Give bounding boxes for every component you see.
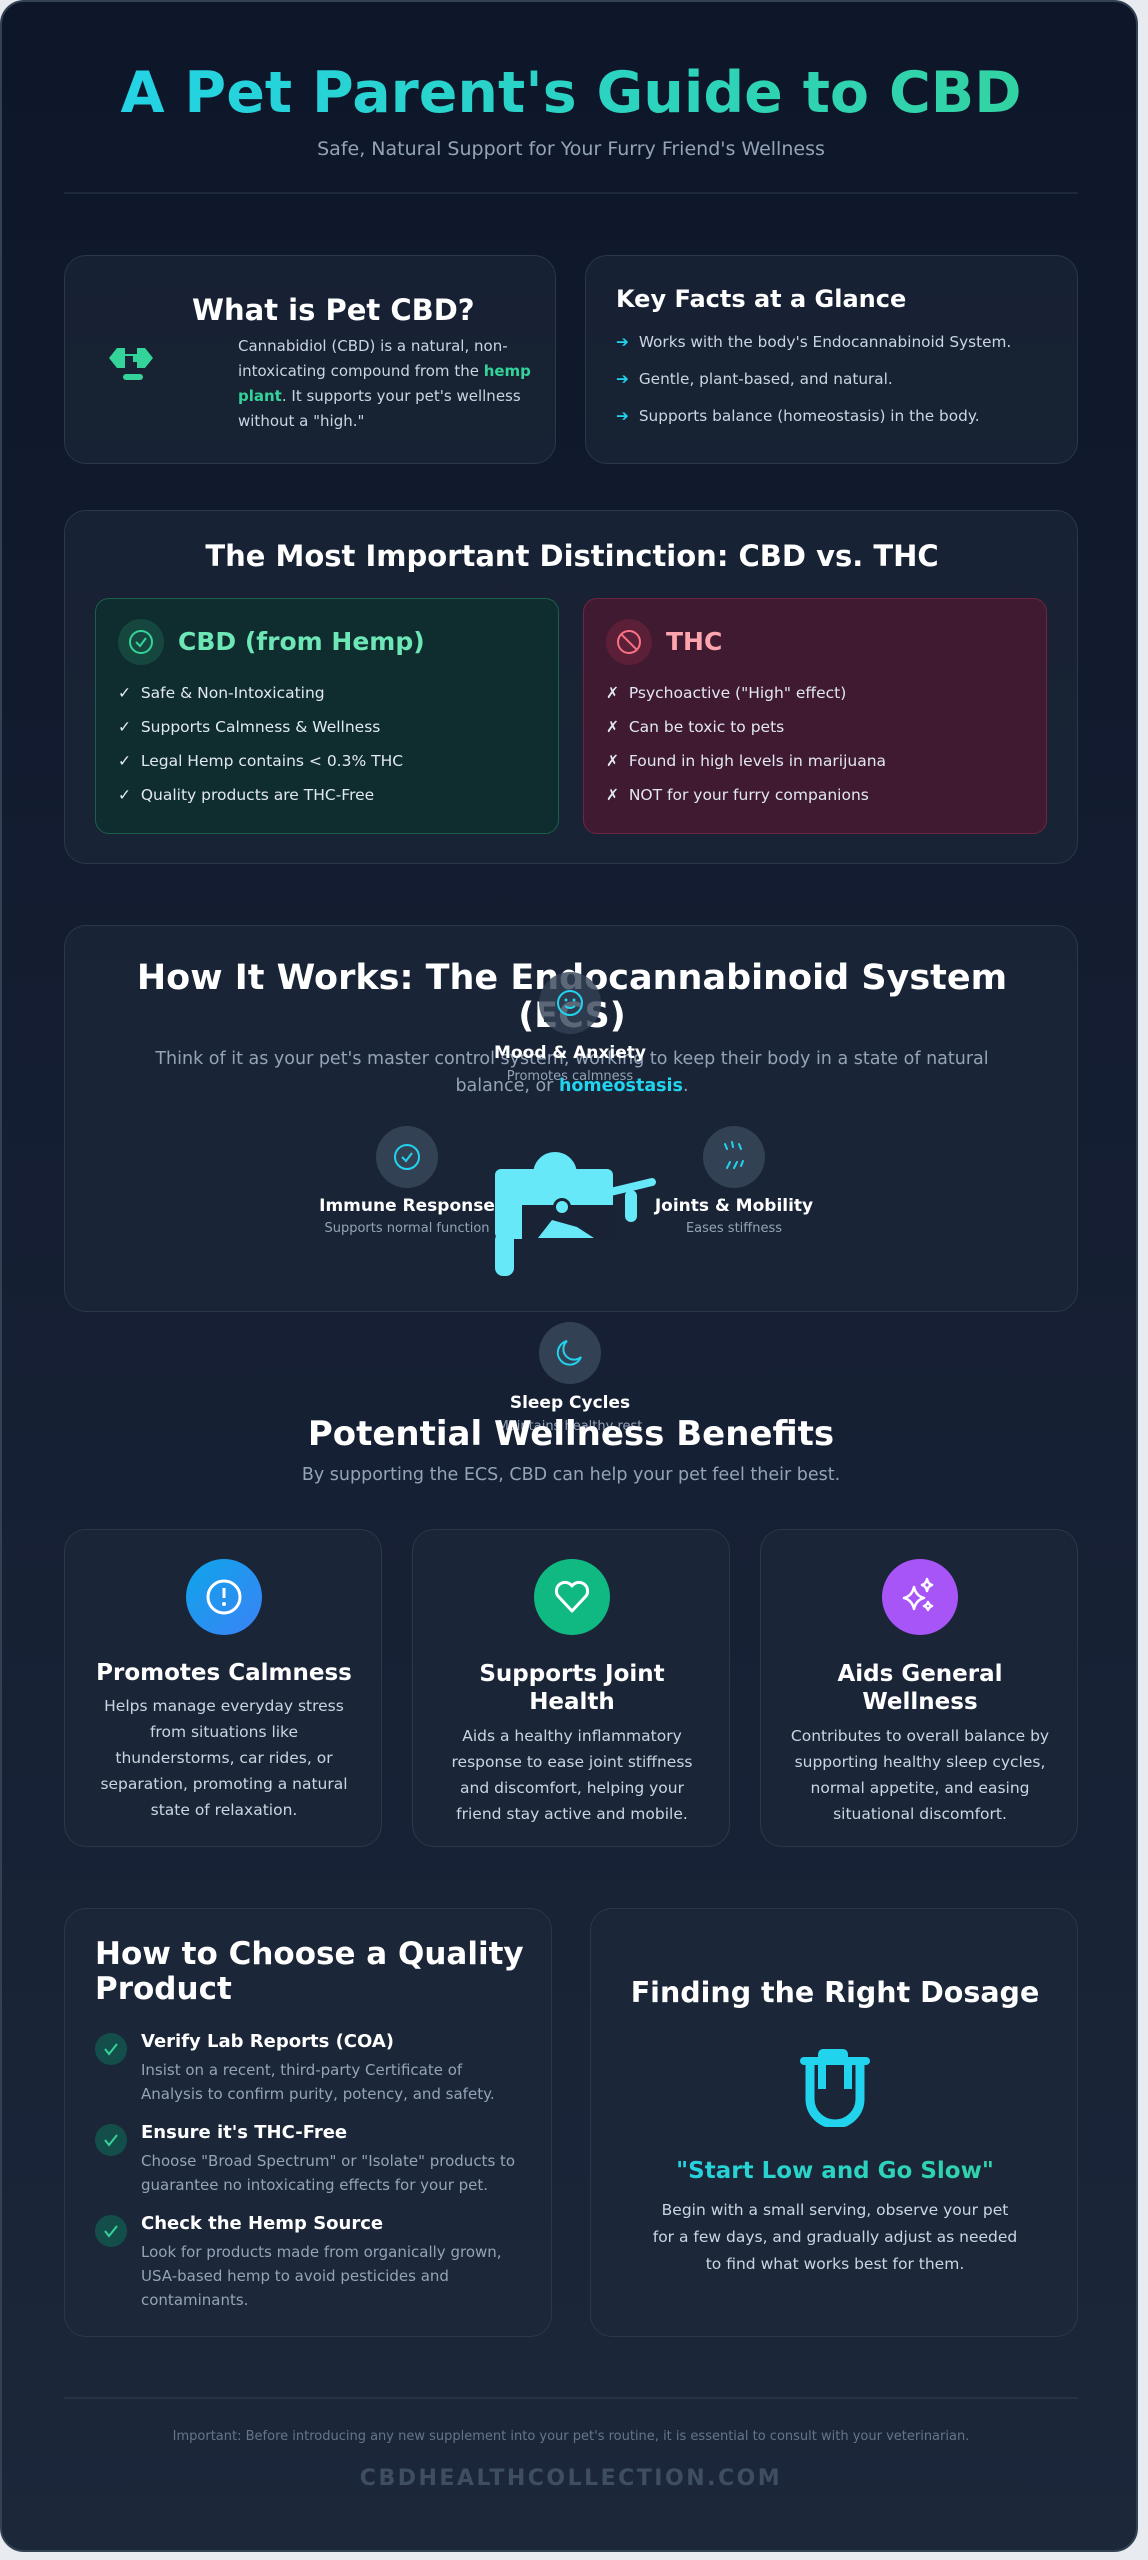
CBD box: ✓ Legal Hemp contains < 0.3% THC xyxy=(118,752,403,770)
brand: CBDHEALTHCOLLECTION.COM xyxy=(360,2466,782,2491)
icon: dropper xyxy=(800,2049,870,2127)
icon: mood & anxiety: Mood & Anxiety xyxy=(494,1043,646,1063)
icon: check xyxy=(118,619,164,665)
CBD box: ✓ Quality products are THC-Free xyxy=(118,786,374,804)
body text: Cannabidiol (CBD) is a natural, non-intoxicating compound from the hemp plant. It supports your pet's wellness without a "high." xyxy=(238,337,531,430)
checklist: Verify Lab Reports (COA) xyxy=(141,2031,394,2052)
checklist: Check the Hemp Source xyxy=(141,2213,383,2234)
CBD box: CBD (from Hemp) xyxy=(178,627,425,656)
CBD box: ✓ Safe & Non-Intoxicating xyxy=(118,684,325,702)
panel: right dosage: Finding the Right Dosage xyxy=(631,1976,1039,2009)
icon: immune response: Immune Response xyxy=(319,1196,495,1216)
THC box: ✗ NOT for your furry companions xyxy=(606,786,869,804)
subtitle: Safe, Natural Support for Your Furry Friend's Wellness xyxy=(317,138,825,160)
panel: aids general wellness: Aids General Wellness xyxy=(837,1661,1003,1715)
icon: ban xyxy=(606,619,652,665)
panel: supports joint health: Supports Joint Health xyxy=(479,1661,665,1715)
benefits subtitle: By supporting the ECS, CBD can help your pet feel their best. xyxy=(302,1465,840,1485)
footer note: Important: Before introducing any new supplement into your pet's routine, it is essential to consult with your veterinarian. xyxy=(173,2429,969,2444)
fact list: ➔ Supports balance (homeostasis) in the body. xyxy=(616,407,980,425)
icon: central pet figure xyxy=(495,1152,656,1276)
heading: What is Pet CBD? xyxy=(192,293,475,327)
fact list: ➔ Works with the body's Endocannabinoid System. xyxy=(616,333,1011,351)
panel: choose quality product: How to Choose a Quality Product xyxy=(95,1936,524,2007)
panel: promotes calmness: Promotes Calmness xyxy=(96,1660,352,1686)
icon: sleep cycles xyxy=(498,1322,642,1434)
panel: what is pet CBD xyxy=(64,255,556,464)
panel: choose quality product xyxy=(64,1908,552,2337)
title: A Pet Parent's Guide to CBD xyxy=(120,60,1022,126)
checklist: Look for products made from organically grown, USA-based hemp to avoid pesticides and contaminants. xyxy=(141,2243,502,2309)
panel: right dosage xyxy=(590,1908,1078,2337)
icon: mood & anxiety: Promotes calmness xyxy=(507,1069,633,1084)
icon: mood & anxiety xyxy=(494,972,646,1084)
icon: sleep cycles: Sleep Cycles xyxy=(510,1393,630,1413)
checklist: Ensure it's THC-Free xyxy=(141,2122,347,2143)
heading: The Most Important Distinction: CBD vs. THC xyxy=(205,539,939,573)
THC box: ✗ Psychoactive ("High" effect) xyxy=(606,684,846,702)
panel: how it works ECS xyxy=(64,925,1078,1312)
panel: promotes calmness xyxy=(64,1529,382,1847)
heading: How It Works: The Endocannabinoid System (ECS) xyxy=(137,958,1007,1036)
checklist: Choose "Broad Spectrum" or "Isolate" products to guarantee no intoxicating effects for your pet. xyxy=(141,2152,515,2194)
THC box: ✗ Can be toxic to pets xyxy=(606,718,784,736)
description: Think of it as your pet's master control system, working to keep their body in a state of natural balance, or homeostasis. xyxy=(155,1049,989,1096)
CBD box: ✓ Supports Calmness & Wellness xyxy=(118,718,380,736)
icon: immune response xyxy=(319,1126,495,1236)
fact list: ➔ Gentle, plant-based, and natural. xyxy=(616,370,893,388)
panel: supports joint health xyxy=(412,1529,730,1847)
icon: immune response: Supports normal function xyxy=(324,1221,490,1236)
panel: supports joint health: Aids a healthy inflammatory response to ease joint stiffness and discomfort, helping your friend stay active and mobile. xyxy=(452,1727,692,1823)
panel: promotes calmness: Helps manage everyday stress from situations like thunderstorms, car rides, or separation, promoting a natural state of relaxation. xyxy=(100,1697,348,1819)
THC box: THC xyxy=(666,627,722,656)
checklist: Insist on a recent, third-party Certificate of Analysis to confirm purity, potency, and safety. xyxy=(141,2061,495,2103)
THC box: ✗ Found in high levels in marijuana xyxy=(606,752,886,770)
panel: CBD vs THC xyxy=(64,510,1078,864)
fact list xyxy=(616,333,1011,425)
THC box xyxy=(583,598,1047,834)
CBD box xyxy=(95,598,559,834)
panel: aids general wellness xyxy=(760,1529,1078,1847)
icon: joints & mobility xyxy=(654,1126,813,1236)
callout quote: "Start Low and Go Slow" xyxy=(676,2158,994,2184)
benefits heading: Potential Wellness Benefits xyxy=(308,1414,834,1454)
icon: joints & mobility: Eases stiffness xyxy=(686,1221,782,1236)
panel: aids general wellness: Contributes to overall balance by supporting healthy sleep cycles, normal appetite, and easing situational discomfort. xyxy=(791,1727,1049,1823)
panel: key facts xyxy=(585,255,1078,464)
panel: right dosage: Begin with a small serving, observe your pet for a few days, and gradually adjust as needed to find what works best for them. xyxy=(653,2201,1017,2273)
icon: hemp leaf xyxy=(109,348,153,380)
checklist xyxy=(95,2031,515,2309)
icon: sleep cycles: Maintains healthy rest xyxy=(498,1419,642,1434)
icon: joints & mobility: Joints & Mobility xyxy=(655,1196,813,1216)
callout quote xyxy=(591,2156,1079,2186)
heading: Key Facts at a Glance xyxy=(616,285,906,313)
